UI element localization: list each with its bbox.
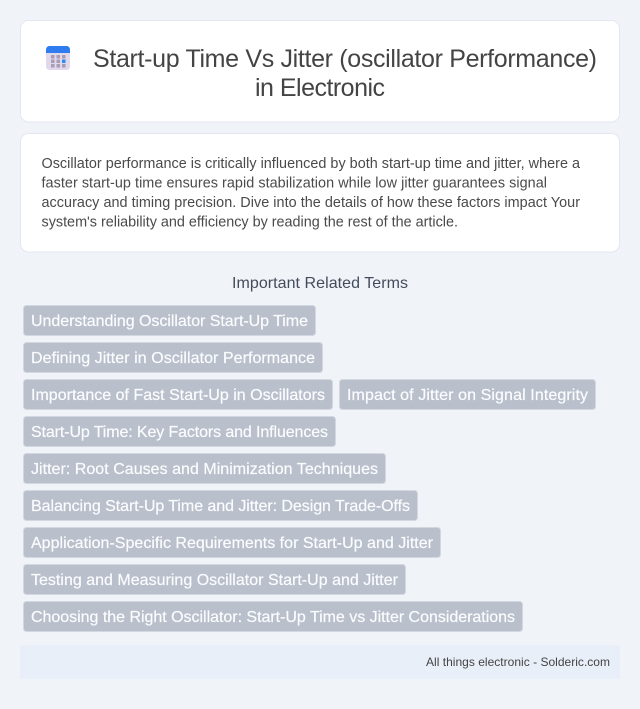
text block: introduction paragraph: Oscillator performance is critically influenced by both start-up time and jitter, where a xyxy=(42,156,580,172)
title: in Electronic xyxy=(255,74,385,102)
footer xyxy=(20,645,620,679)
tag: understanding start-up time xyxy=(24,306,316,336)
tag: start-up key factors xyxy=(24,416,336,446)
tag: choosing the right oscillator xyxy=(24,602,522,632)
tag: defining jitter xyxy=(24,342,322,372)
tag: defining jitter: Defining Jitter in Oscillator Performance xyxy=(31,350,315,367)
tag: importance of fast start-up: Importance of Fast Start-Up in Oscillators xyxy=(31,387,325,404)
text block: introduction paragraph: accuracy and timing precision. Dive into the details of how these factors impact Your xyxy=(42,195,580,211)
text block: introduction paragraph: faster start-up time ensures rapid stabilization while low jitter guarantees signal xyxy=(42,176,547,192)
panel: title card xyxy=(20,20,620,122)
tag: application requirements: Application-Specific Requirements for Start-Up and Jitter xyxy=(31,535,434,552)
tag: balancing trade-offs: Balancing Start-Up Time and Jitter: Design Trade-Offs xyxy=(31,498,410,515)
icon: calendar xyxy=(46,46,70,70)
panel: introduction xyxy=(20,134,620,252)
tag: importance of fast start-up xyxy=(24,380,332,410)
title: Start-up Time Vs Jitter (oscillator Performance) xyxy=(93,45,597,73)
tag: choosing the right oscillator: Choosing the Right Oscillator: Start-Up Time vs Jitter Considerations xyxy=(31,609,515,626)
text block: introduction paragraph xyxy=(42,156,580,230)
text block: introduction paragraph: system's reliability and efficiency by reading the rest of the article. xyxy=(42,214,458,230)
title xyxy=(93,45,597,102)
tag: impact of jitter xyxy=(340,380,596,410)
tag: testing and measuring xyxy=(24,564,406,594)
tag: testing and measuring: Testing and Measuring Oscillator Start-Up and Jitter xyxy=(31,572,399,589)
tag: start-up key factors: Start-Up Time: Key Factors and Influences xyxy=(31,424,328,441)
tag: understanding start-up time: Understanding Oscillator Start-Up Time xyxy=(31,313,308,330)
tag: jitter root causes xyxy=(24,454,386,484)
heading: important related terms: Important Related Terms xyxy=(232,275,408,292)
tag: impact of jitter: Impact of Jitter on Signal Integrity xyxy=(347,387,588,404)
footer: All things electronic - Solderic.com xyxy=(426,655,610,669)
tag: jitter root causes: Jitter: Root Causes and Minimization Techniques xyxy=(31,461,378,478)
tag: balancing trade-offs xyxy=(24,490,418,520)
panel: related term tags xyxy=(24,306,596,632)
tag: application requirements xyxy=(24,528,440,558)
